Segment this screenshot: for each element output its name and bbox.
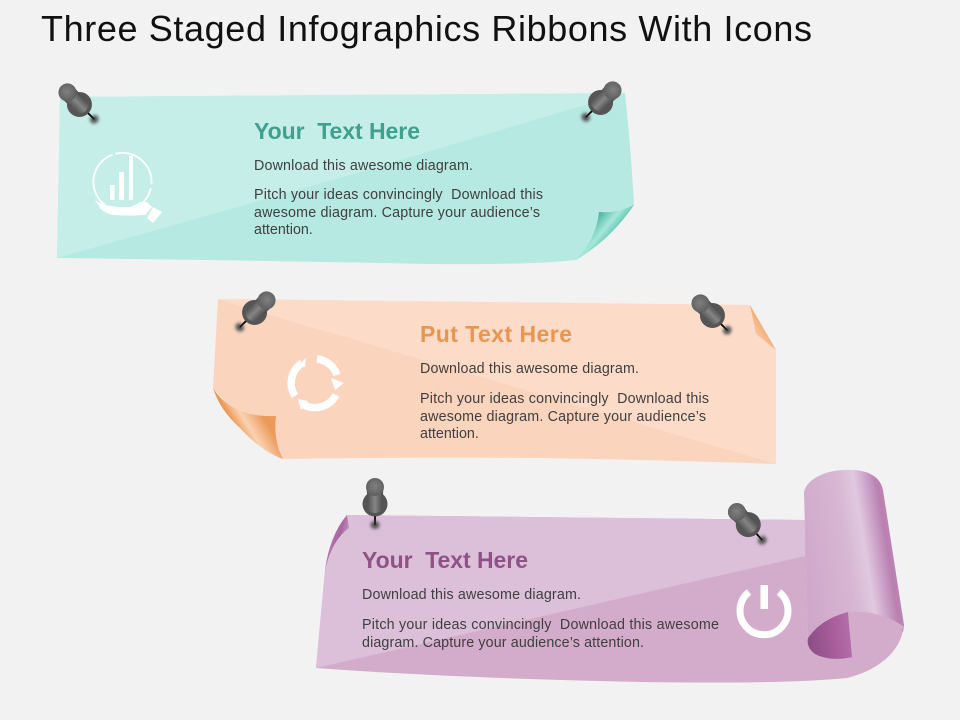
purple body text	[362, 617, 719, 651]
orange body text: Pitch your ideas convincingly Download this	[420, 391, 709, 407]
purple subheading: Download this awesome diagram.	[362, 587, 581, 603]
teal page curl	[576, 205, 634, 260]
teal body text: awesome diagram. Capture your audience’s	[254, 205, 540, 221]
orange body text	[420, 391, 709, 442]
purple ribbon body	[316, 515, 903, 682]
icon: cycle arrows	[291, 358, 344, 410]
panel: orange ribbon	[213, 299, 776, 464]
teal subheading: Download this awesome diagram.	[254, 158, 473, 174]
purple body text: diagram. Capture your audience’s attention.	[362, 635, 644, 651]
orange subheading: Download this awesome diagram.	[420, 361, 639, 377]
orange ribbon highlight	[218, 299, 776, 464]
pin: purple right	[722, 497, 774, 552]
panel: purple scroll ribbon	[316, 470, 904, 682]
purple heading: Your Text Here	[362, 547, 528, 573]
orange body text: attention.	[420, 426, 479, 442]
teal ribbon body	[57, 93, 634, 264]
teal body text: attention.	[254, 222, 313, 238]
orange heading: Put Text Here	[420, 321, 572, 347]
purple body text: Pitch your ideas convincingly Download this awesome	[362, 617, 719, 633]
icon: power symbol	[740, 585, 788, 635]
pin: teal right	[574, 75, 628, 129]
icon: hand holding chart	[94, 153, 162, 223]
orange body text: awesome diagram. Capture your audience’s	[420, 409, 706, 425]
purple left fold	[325, 515, 349, 570]
orange ribbon body	[213, 299, 776, 464]
teal body text	[254, 187, 543, 238]
pin: orange left	[228, 285, 282, 339]
purple roll opening	[808, 612, 852, 659]
pin: purple left	[362, 478, 388, 529]
orange upper fold	[750, 305, 776, 350]
purple scroll roll	[804, 470, 904, 640]
pin: teal left	[52, 77, 106, 131]
orange page curl	[213, 388, 283, 459]
teal body text: Pitch your ideas convincingly Download this	[254, 187, 543, 203]
teal heading: Your Text Here	[254, 118, 420, 144]
title: Three Staged Infographics Ribbons With Icons	[41, 8, 812, 49]
pin: orange right	[685, 288, 739, 342]
purple roll front	[848, 612, 903, 657]
panel: teal ribbon	[57, 93, 634, 264]
teal ribbon highlight	[57, 93, 625, 258]
purple ribbon highlight	[316, 515, 805, 668]
